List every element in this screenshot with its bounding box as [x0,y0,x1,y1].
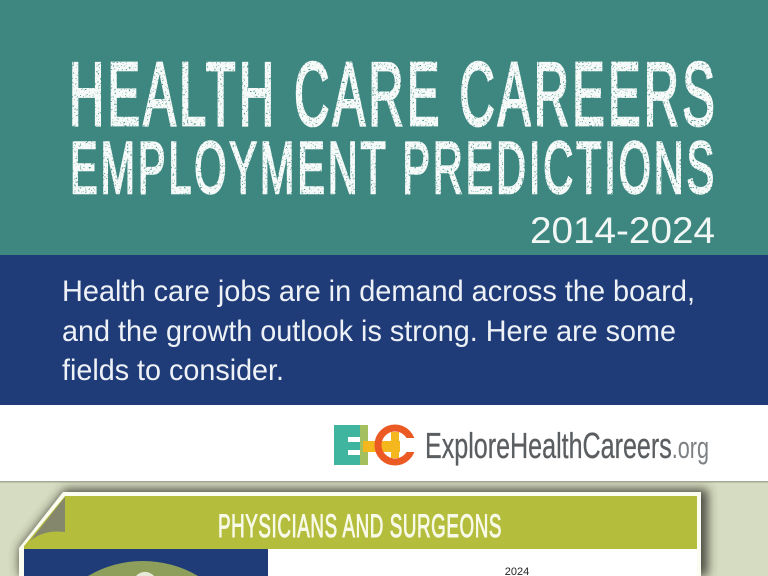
intro text [62,275,695,387]
intro text: Health care jobs are in demand across the board, [62,275,695,308]
date range: 2014-2024 [530,210,715,251]
banner heading: PHYSICIANS AND SURGEONS [218,508,502,544]
logo band [0,405,768,482]
intro text: fields to consider. [62,354,284,387]
corner fold [30,497,65,541]
header band [0,0,768,255]
intro panel [0,255,768,405]
icon: circle [88,561,198,576]
icon: EHC mark [334,425,417,465]
title [69,45,718,209]
banner [24,496,697,549]
background panel [0,482,768,576]
card shadow [19,489,708,576]
blue panel [24,549,268,576]
card: physicians and surgeons [19,492,701,576]
logo [334,425,709,466]
intro text: and the growth outlook is strong. Here are some [62,315,676,348]
